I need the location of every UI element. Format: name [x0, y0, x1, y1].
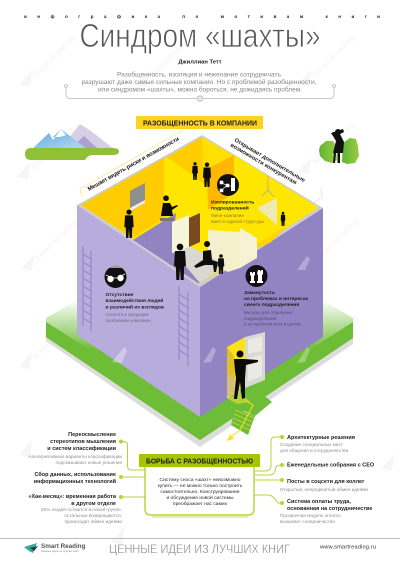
left list: происходит обмен идеями	[64, 519, 122, 524]
background watermarks: Smart Reading	[31, 315, 77, 361]
building walls	[77, 135, 323, 417]
callout: closed on own problems: Замкнутость	[244, 290, 275, 296]
right list: Еженедельные собрания с CEO	[287, 462, 375, 468]
banner: left roof label: Мешает видеть риски и возможности	[87, 136, 181, 193]
right list: Система оплаты труда,	[287, 499, 351, 505]
text box	[145, 467, 254, 517]
right list: Посты в соцсети для коллег	[287, 479, 365, 485]
door	[189, 213, 200, 247]
callout: isolated departments: подразделений	[211, 204, 249, 212]
left list: 50% людей остаются в новой группе,	[41, 506, 122, 512]
logo: Ценные идеи из лучших книг	[41, 549, 79, 553]
icon: glasses	[104, 266, 126, 288]
lawn	[46, 300, 353, 447]
icon: mountains	[25, 124, 119, 160]
entrance door with man	[227, 332, 265, 404]
rim	[77, 135, 323, 287]
callout: isolated departments: вместо единой структуры	[211, 218, 264, 224]
stairs with arrow	[227, 401, 255, 441]
callout: closed on own problems	[244, 265, 308, 326]
right wall	[200, 208, 323, 417]
left wall	[77, 205, 200, 417]
background watermarks: Smart Reading	[29, 125, 75, 171]
icon: woman in bushes	[319, 129, 359, 164]
body: преображает нас самих	[173, 501, 228, 507]
right list: для общения и сотрудничества	[280, 448, 349, 453]
intro paragraph: разрушают даже самые сильные компании. Но с проблемой разобщенности,	[82, 79, 317, 86]
body: самостоятельно. Конструирование	[160, 489, 240, 495]
left list: Переосмысление	[68, 432, 116, 438]
callout: lack of interaction: проблемам компании	[106, 318, 151, 323]
logo: Smart Reading	[41, 543, 86, 550]
left list: в другом отделе	[71, 501, 116, 507]
left list: информационных технологий	[34, 478, 116, 485]
callout: closed on own problems: Выгоды для отдельных	[244, 310, 293, 315]
callout: isolated departments: Мини-компании	[211, 213, 244, 218]
title: Синдром «шахты»	[80, 17, 320, 54]
left list: стереотипов мышления	[50, 439, 116, 445]
body: и обсуждение новой системы	[166, 494, 234, 501]
callout: lack of interaction: взаимодействия людей	[106, 297, 163, 304]
office people silhouettes	[124, 162, 285, 280]
banner: right roof label	[229, 138, 322, 203]
banner: right roof label: возможности конкурентам	[229, 143, 298, 186]
left list: и систем классификации	[47, 445, 116, 452]
logo	[24, 543, 86, 553]
body: Систему сноса «шахт» невозможно	[160, 477, 241, 483]
intro paragraph	[82, 72, 317, 94]
interior floor plan	[81, 137, 318, 283]
callout: lack of interaction: Отсутствие	[106, 292, 134, 298]
background watermarks: Smart Reading	[313, 313, 359, 359]
right list: вызывает соперничество	[280, 519, 335, 524]
right list: Открытый, непредвзятый обмен идеями	[280, 486, 368, 492]
left list: подсказывают новые решения	[55, 460, 122, 465]
icon: chess towers	[246, 265, 268, 287]
callout: isolated departments: Изолированность	[211, 200, 254, 206]
banner: right roof label: Открывает дополнительные	[233, 138, 306, 184]
author: Джиллиан Тетт	[178, 60, 222, 66]
left list	[28, 432, 122, 524]
right list: Архитектурные решения	[287, 435, 355, 441]
callout: isolated departments	[211, 174, 264, 224]
right list: основанная на сотрудничестве	[287, 506, 372, 512]
background watermarks: Smart Reading	[310, 120, 356, 166]
right list: Создание специальных мест	[280, 442, 344, 447]
callout: lack of interaction	[104, 266, 164, 323]
tagline: ЦЕННЫЕ ИДЕИ ИЗ ЛУЧШИХ КНИГ	[109, 542, 290, 556]
heading: БОРЬБА С РАЗОБЩЕННОСТЬЮ	[146, 456, 253, 466]
body	[158, 477, 243, 507]
right list	[280, 435, 375, 524]
left list: «Хак-месяц»: временная работа	[28, 493, 117, 500]
callout: closed on own problems: а не проблем всех в целом	[244, 322, 301, 326]
background watermarks: Smart Reading	[310, 33, 356, 79]
callout: closed on own problems: своего подразделения	[244, 303, 299, 308]
callout: lack of interaction: Слепота к грядущим	[106, 312, 148, 317]
footer	[0, 538, 400, 556]
url: www.smartreading.ru	[319, 544, 376, 550]
lamp	[262, 176, 274, 197]
callout: lack of interaction: и различий их взглядов	[106, 304, 164, 310]
icon: org scheme	[217, 174, 239, 196]
right list: Прозрачная модель оплаты	[280, 513, 341, 518]
entrance mat	[227, 388, 272, 416]
section label: disconnection in the company: РАЗОБЩЕННОСТЬ В КОМПАНИИ	[143, 118, 257, 128]
intro bracket	[64, 84, 336, 101]
left connectors	[120, 440, 146, 498]
callout: closed on own problems: подразделений,	[244, 315, 277, 321]
left list: Альтернативные варианты классификации	[28, 454, 122, 459]
door partition	[172, 215, 189, 253]
background watermarks: Smart Reading	[31, 33, 77, 79]
intro paragraph: Разобщенность, изоляция и нежелание сотрудничать	[117, 72, 281, 78]
window	[130, 183, 145, 211]
left list: остальные возвращаются,	[64, 513, 122, 518]
overline: infographic by book: инфографика по мотивам книги	[24, 13, 380, 19]
section: fighting disconnection	[139, 454, 260, 517]
background watermarks: Smart Reading	[313, 217, 359, 263]
background watermarks: Smart Reading	[33, 217, 79, 263]
section label: disconnection in the company	[136, 116, 263, 129]
callout: closed on own problems: на проблемах и интересах	[244, 295, 308, 302]
body: купить — ее можно только построить	[158, 484, 243, 489]
left list: Сбор данных, использование	[34, 471, 116, 478]
right connectors	[254, 436, 284, 504]
intro paragraph: или синдромом «шахты», можно бороться, не дожидаясь проблем.	[98, 88, 302, 94]
background watermarks: Smart Reading	[148, 33, 194, 79]
